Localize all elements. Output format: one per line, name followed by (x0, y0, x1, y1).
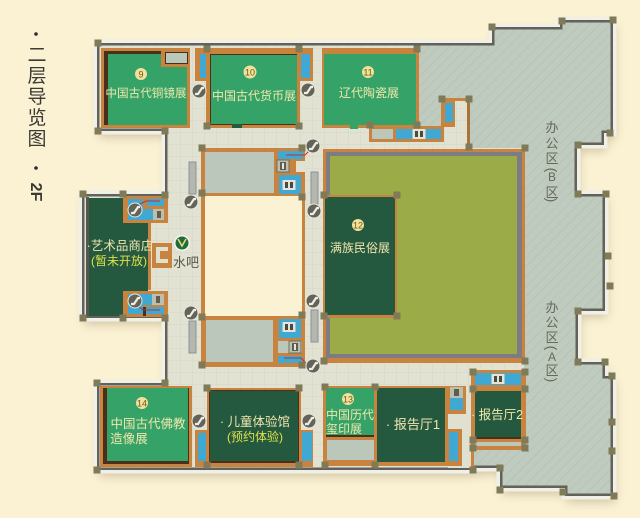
panel: report hall 2 (471, 370, 526, 470)
icon: escalator (128, 203, 142, 217)
icon: number 10: 10 (245, 68, 255, 78)
corridor benches (189, 162, 318, 353)
label: 办公区(A区): 区 (545, 363, 559, 378)
icons: escalators (184, 83, 321, 428)
label: 办公区(A区): A (548, 350, 556, 364)
label: 中国古代铜镜展: 中国古代铜镜展 (105, 86, 187, 100)
wall posts (80, 16, 618, 500)
label: 办公区(B区): 办 (545, 120, 559, 135)
label: 预约体验: (预约体验) (227, 429, 283, 444)
label: 满族民俗展: 满族民俗展 (330, 241, 390, 255)
panel: large olive hall (323, 149, 525, 363)
icon: number 12: 12 (353, 220, 363, 230)
label: 办公区(A区): ) (544, 378, 560, 382)
icon: restroom (412, 129, 426, 139)
title: 二层导览图 2F: 导 (27, 87, 47, 108)
label: 办公区(A区) (544, 300, 560, 382)
icon: number 9: 9 (138, 70, 144, 80)
label: 水吧: 水吧 (173, 255, 199, 270)
title: 二层导览图 2F: 层 (27, 66, 47, 87)
panel: room 14 Buddhist statues (100, 386, 192, 467)
title: 二层导览图 2F: 图 (27, 129, 47, 150)
label: 办公区(A区): ( (544, 346, 560, 351)
panel: room 9 bronze mirrors (101, 48, 190, 128)
label: 儿童体验馆: · 儿童体验馆 (220, 414, 290, 429)
title: 二层导览图 2F (27, 32, 47, 202)
lower service rooms (275, 316, 306, 365)
label: 办公区(B区): ( (544, 168, 560, 173)
label: 中国历代玺印展: 中国历代 (326, 407, 374, 422)
label: 报告厅1: · 报告厅1 (386, 417, 440, 432)
icon: number 13: 13 (343, 394, 353, 404)
label: 中国古代佛教造像展 (110, 416, 186, 446)
upper service rooms (276, 151, 309, 195)
panel: central ring upper (201, 148, 309, 367)
label: 辽代陶瓷展: 辽代陶瓷展 (339, 85, 399, 100)
icon: water bar (174, 235, 190, 251)
label: 艺术品商店: ·艺术品商店 (87, 238, 153, 253)
panel: water bar (152, 235, 199, 270)
panel: room 13 historic seals (323, 386, 377, 466)
panel: service rooms beside room 11 (369, 98, 470, 148)
label: 办公区(B区): 区 (545, 151, 559, 166)
icon: number 11: 11 (363, 68, 373, 78)
panel: art shop (86, 197, 153, 316)
label: 中国古代佛教造像展: 中国古代佛教 (110, 416, 186, 431)
label: 办公区(B区): 区 (545, 185, 559, 200)
label: 办公区(A区): 办 (545, 300, 559, 315)
label: 暂未开放: (暂未开放) (91, 253, 147, 268)
panel: children's experience hall (195, 388, 313, 467)
icon: restroom (492, 374, 504, 384)
label: 办公区(B区): ) (544, 198, 560, 202)
title: 二层导览图 2F: 二 (27, 45, 47, 66)
panel: room 10 ancient coins (195, 48, 313, 128)
icon: number 14: 14 (137, 398, 147, 408)
label: 中国古代货币展: 中国古代货币展 (212, 88, 296, 103)
title: 二层导览图 2F: 览 (27, 107, 47, 129)
icon: escalator (128, 294, 142, 308)
label: 办公区(A区): 公 (545, 315, 559, 330)
label: 中国古代佛教造像展: 造像展 (110, 432, 148, 446)
title: 二层导览图 2F: 2F (27, 183, 44, 202)
label: 办公区(B区) (544, 120, 560, 202)
panel: report hall 1 (375, 386, 472, 468)
label: 中国历代玺印展: 玺印展 (326, 422, 362, 436)
label: 中国历代玺印展 (326, 407, 374, 436)
panel: room 12 Manchu folk customs (323, 195, 397, 318)
label: 办公区(A区): 区 (545, 330, 559, 345)
panel: art shop upper service rooms (123, 196, 168, 223)
label: 办公区(B区): 公 (545, 136, 559, 151)
label: 报告厅2: · 报告厅2 (471, 407, 523, 422)
panel: room 11 Liao ceramics (322, 48, 419, 129)
label: 办公区(B区): B (548, 170, 556, 184)
panel: art shop lower service rooms (123, 291, 168, 317)
